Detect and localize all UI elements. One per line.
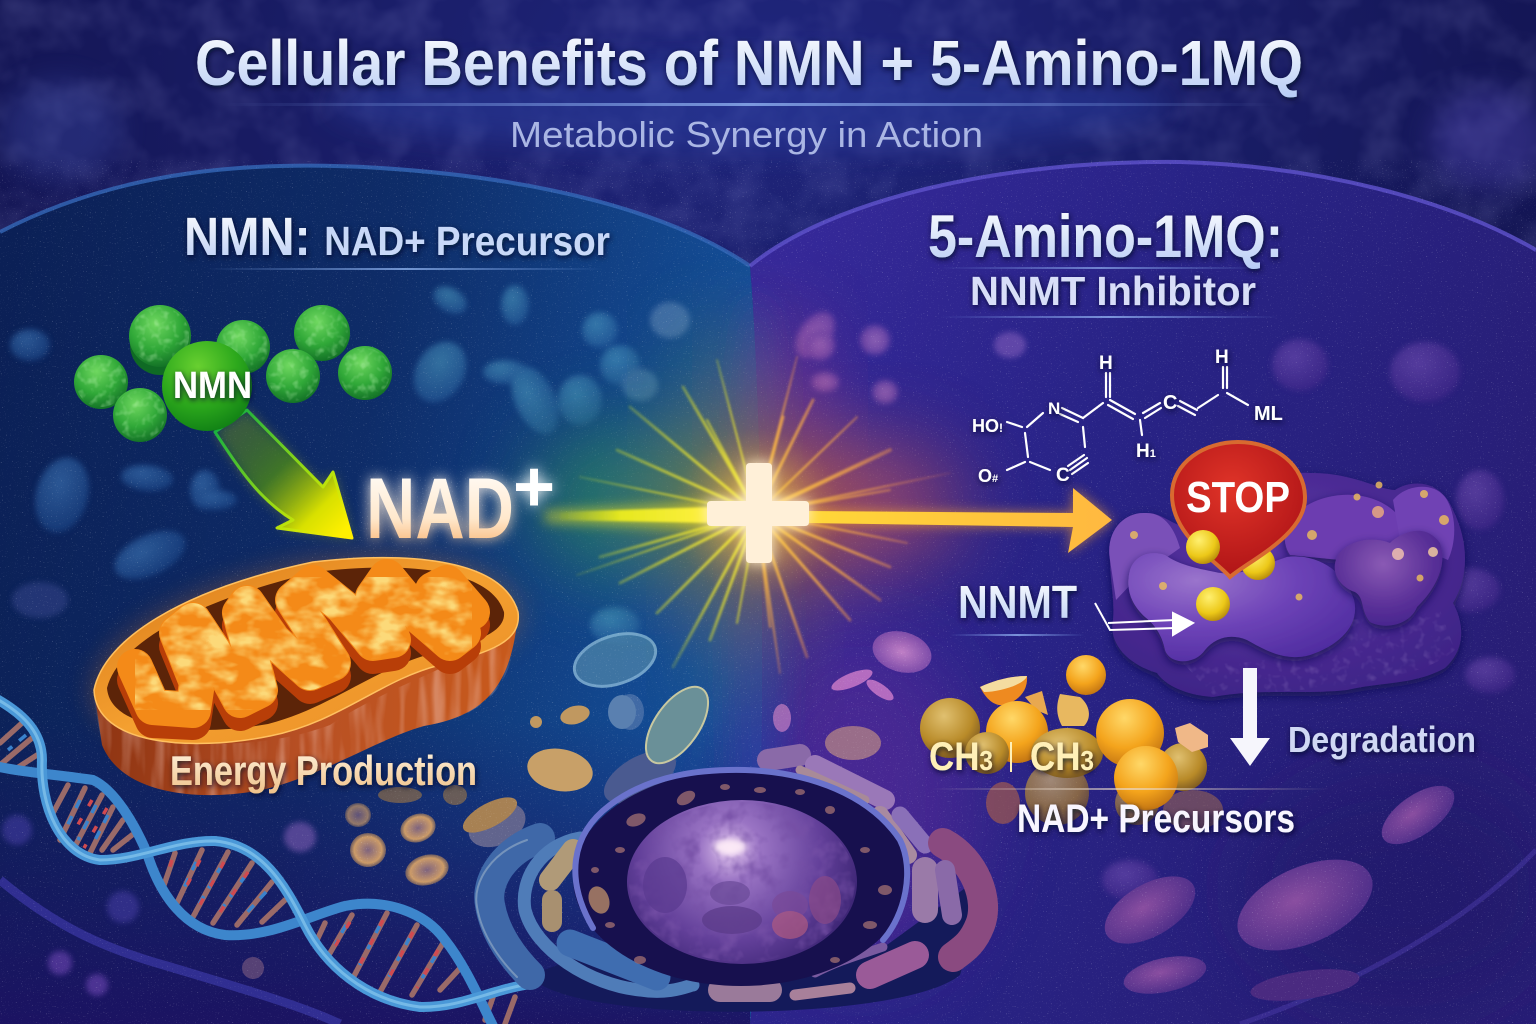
title divider [220, 103, 1280, 106]
NMN molecule cluster [74, 305, 392, 442]
CH3 labels [929, 735, 1094, 779]
outer wall [94, 612, 518, 795]
cristae side shadow [135, 590, 472, 722]
NAD+ label: NAD [366, 461, 514, 557]
DNA rungs [0, 723, 515, 1024]
stop sign [1172, 442, 1305, 577]
protein front lobe [1128, 553, 1355, 661]
NMN molecule cluster: NMN [173, 365, 252, 407]
rays left [577, 360, 757, 667]
heading: 5-Amino-1MQ NNMT Inhibitor [928, 203, 1283, 318]
chemical structure: H [1215, 347, 1229, 368]
rim [94, 558, 518, 744]
arrow: plus to NNMT [805, 488, 1112, 553]
protein back layer [1109, 473, 1465, 697]
panel: left lobe NMN [0, 166, 762, 1024]
cell nucleus [476, 676, 990, 1012]
protein back texture [1180, 610, 1455, 695]
protein NNMT [1109, 473, 1465, 697]
golgi bands [476, 755, 983, 995]
degradation arrow [1230, 668, 1270, 766]
arrow: NMN to NAD+ [215, 410, 352, 538]
wall streaks [94, 630, 516, 795]
heading: 5-Amino-1MQ NNMT Inhibitor: 5-Amino-1MQ: [928, 203, 1283, 270]
protein mid lobe [1285, 495, 1404, 560]
methyl group spheres [920, 655, 1223, 830]
blue organelles left [10, 281, 690, 643]
nucleus texture [629, 802, 855, 962]
rung base pairs blue [8, 735, 436, 985]
cristae highlights [135, 577, 472, 710]
protein left rear lobe [1109, 513, 1180, 600]
protein top right lobe [1393, 487, 1454, 560]
yellow sphere behind stop [1241, 546, 1275, 580]
chemical structure [972, 347, 1283, 486]
chemical structure: O# [978, 466, 998, 486]
cristae folds [135, 577, 472, 710]
organelle base under nucleus [530, 870, 990, 1012]
DNA helix [0, 698, 530, 1024]
purple organelles right [787, 305, 1515, 900]
chemical structure: C [1056, 465, 1070, 486]
chemical structure: C [1163, 392, 1177, 414]
DNA strand highlight [0, 698, 530, 1007]
chemical structure: H1 [1136, 441, 1156, 462]
upper left organelles [524, 676, 720, 814]
NAD+ label: + [513, 447, 555, 527]
nuclear interior [573, 770, 909, 986]
DNA strand two [0, 766, 495, 1024]
nuclear envelope [575, 770, 907, 940]
cell membrane band lower left [0, 880, 340, 1024]
CH3 labels: CH3 [929, 735, 993, 779]
inner matrix [107, 568, 504, 730]
pink cells near center [773, 625, 936, 760]
nucleus highlight [714, 839, 746, 855]
interior specks [585, 784, 892, 964]
mitochondrion [94, 558, 518, 795]
degradation label: Degradation [1288, 719, 1476, 760]
title: Cellular Benefits of NMN + 5-Amino-1MQ [195, 27, 1303, 99]
dim background spheres [986, 743, 1223, 830]
chemical structure: HO! [972, 416, 1003, 436]
CH3 labels: CH3 [1030, 735, 1094, 779]
outer glow [94, 558, 518, 744]
NAD+ Precursors label: NAD+ Precursors [1017, 797, 1295, 841]
NNMT pointer arrow [1095, 603, 1193, 635]
subtitle: Metabolic Synergy in Action [510, 114, 983, 155]
plus sign [707, 463, 809, 563]
yellow inhibitor spheres [1186, 530, 1230, 621]
beam from NAD+ to plus [545, 502, 712, 530]
cells near burst [568, 624, 662, 696]
rays vertical [754, 315, 760, 725]
nucleolus [627, 800, 857, 964]
starburst [530, 315, 960, 725]
label: Energy Production: Energy Production [170, 747, 477, 794]
background organelles [0, 281, 1515, 1024]
protein right heart lobe [1335, 531, 1442, 626]
NNMT label: NNMT [958, 576, 1077, 628]
gold organelles lower left [2, 785, 533, 996]
nucleus lumps [643, 857, 841, 939]
chemical structure: ML [1254, 403, 1283, 425]
panel: right lobe 5-Amino-1MQ [731, 162, 1536, 1024]
protein flecks [1130, 482, 1449, 600]
half dome chunk [980, 676, 1027, 705]
precursor divider [930, 788, 1330, 790]
chemical structure: N [1048, 399, 1060, 418]
heading: NMN NAD+ Precursor: NMN: NAD+ Precursor [184, 207, 610, 267]
DNA strand one [0, 698, 530, 1007]
large lower right mitochondria [1094, 775, 1464, 1007]
heading: 5-Amino-1MQ NNMT Inhibitor: NNMT Inhibitor [970, 268, 1256, 314]
rays right [757, 357, 950, 673]
stop sign: STOP [1186, 473, 1290, 522]
chemical structure: H [1099, 353, 1113, 374]
rung base pairs red [72, 800, 438, 988]
